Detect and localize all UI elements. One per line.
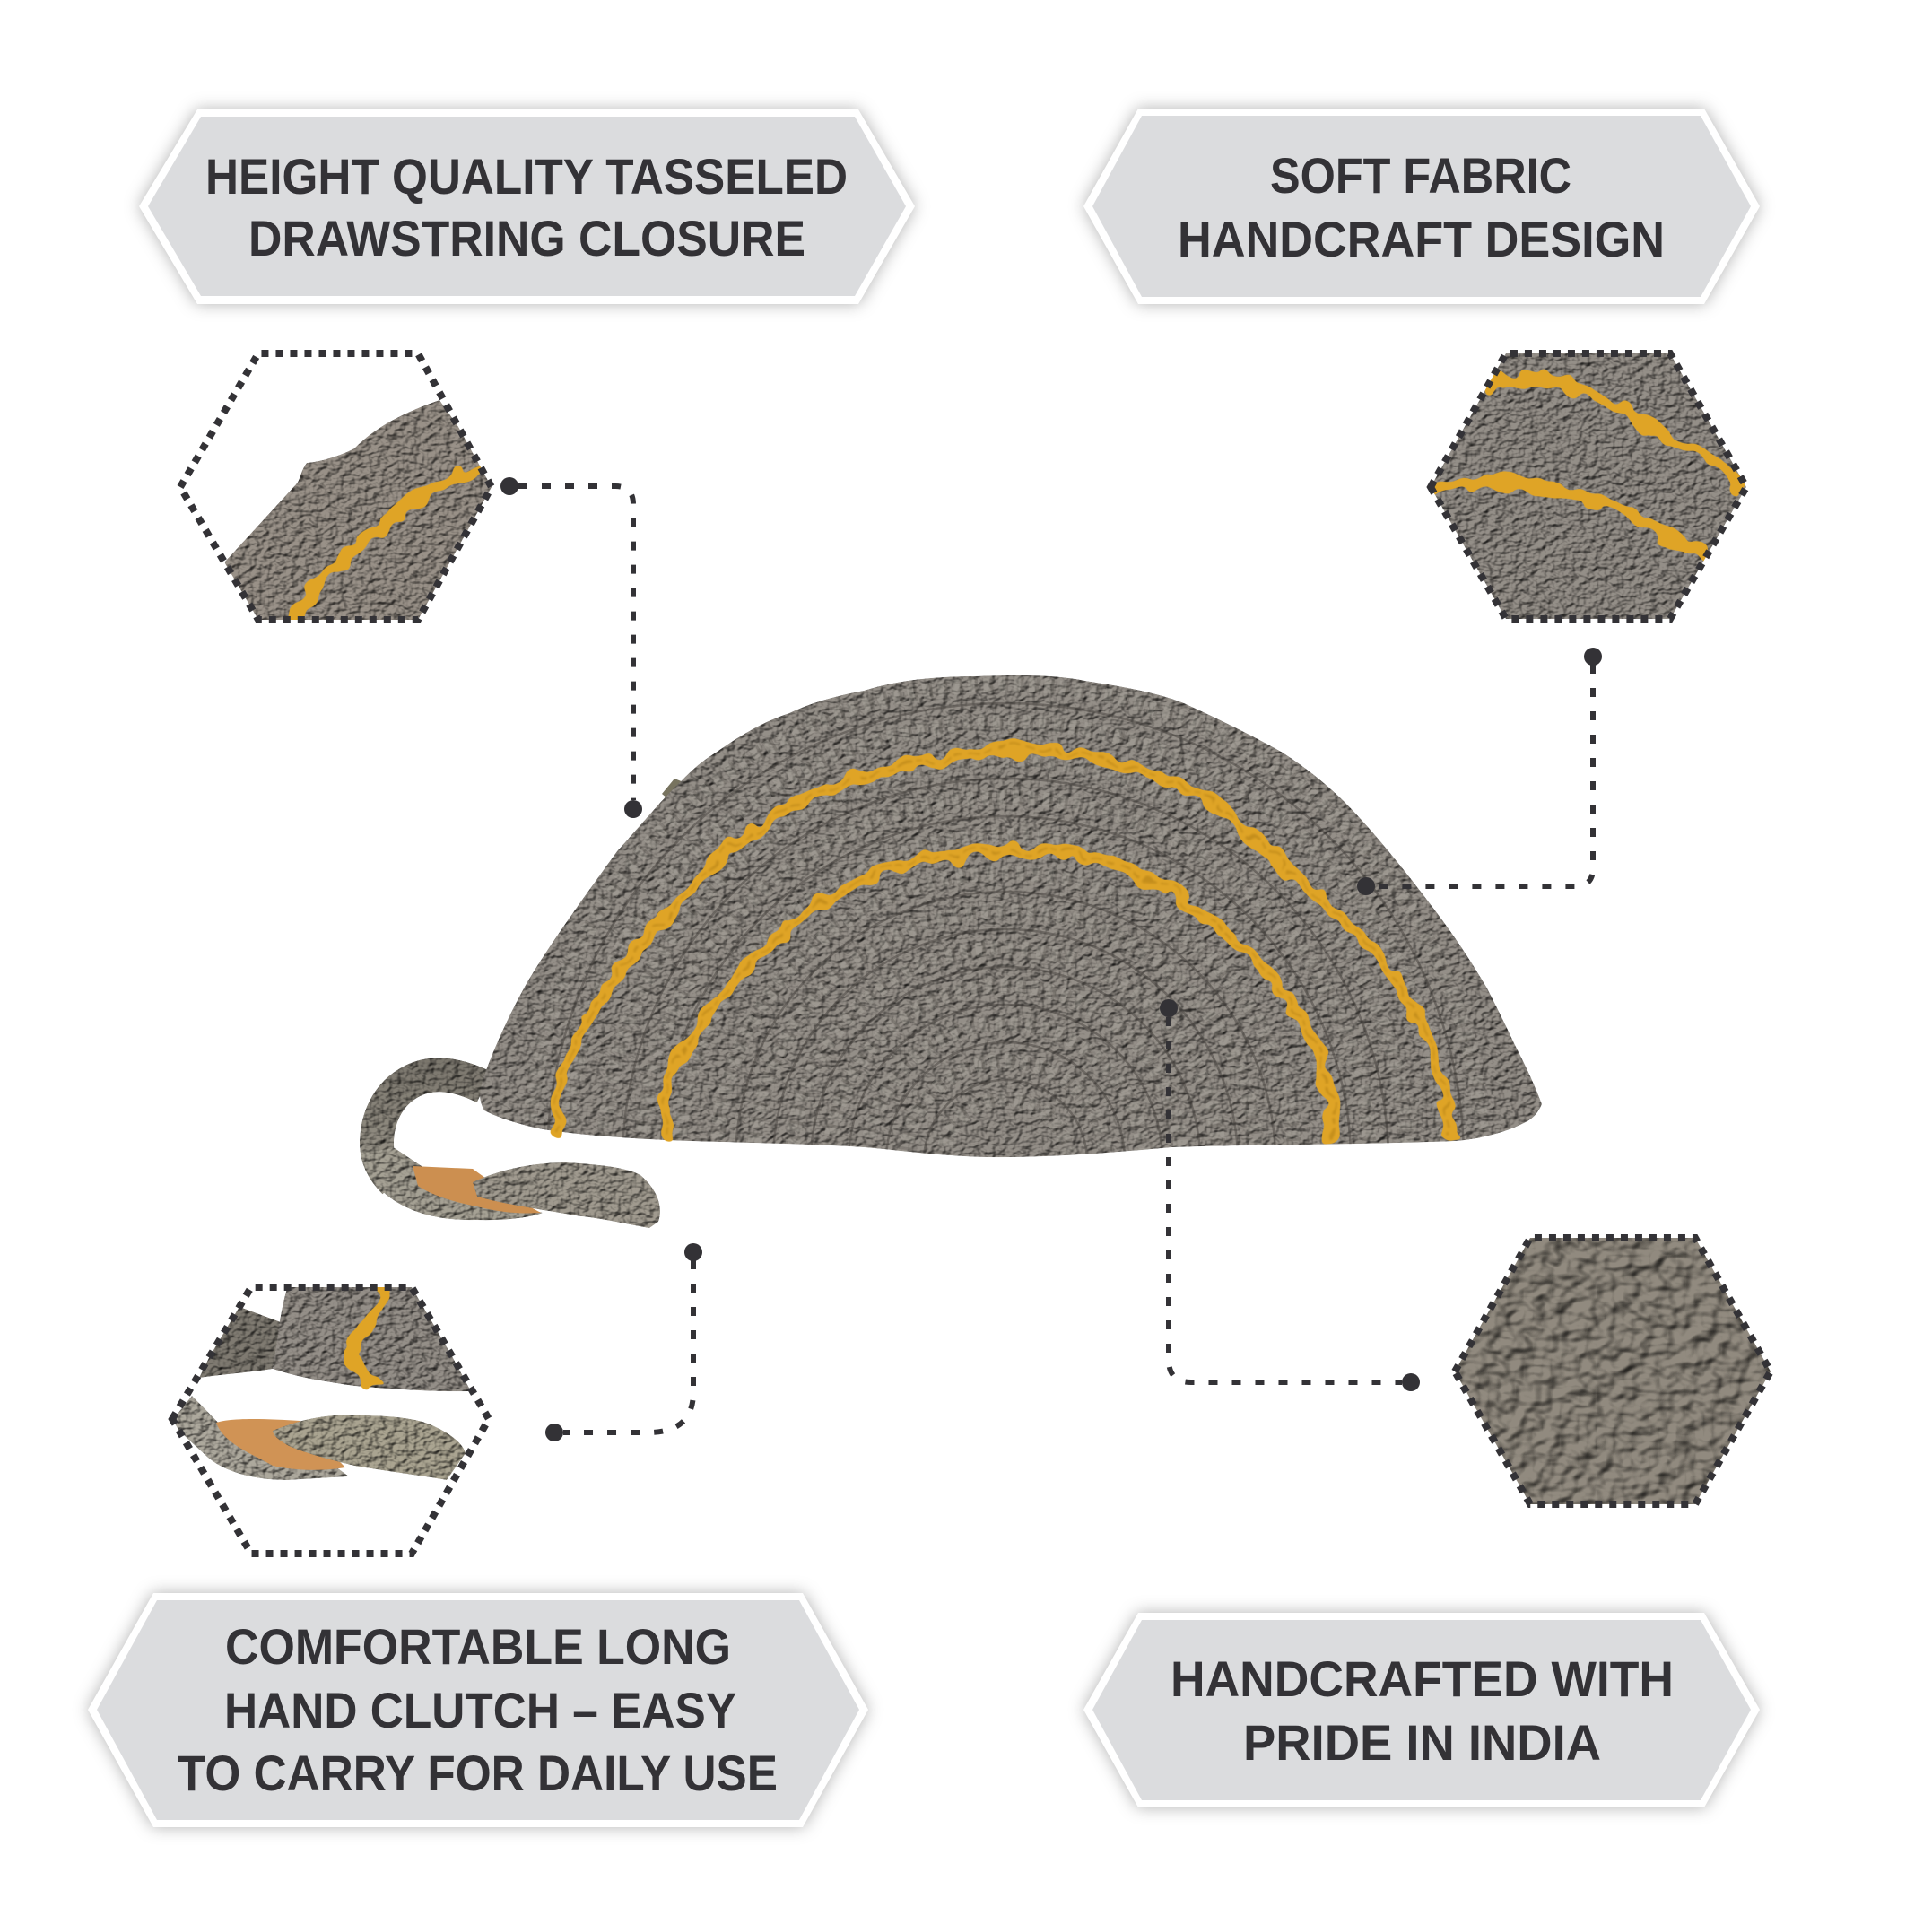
weave dotted outline (1455, 1238, 1771, 1504)
banner text: SOFT FABRIC (1270, 147, 1571, 204)
connector: fabric hexagon to bag (1357, 648, 1602, 895)
connector: strap hexagon to bag (545, 1243, 702, 1441)
clutch bag product illustration (361, 675, 1542, 1639)
tassel loop (473, 1162, 660, 1228)
closure dotted outline (180, 353, 492, 620)
banner: soft fabric handcraft design (1083, 109, 1760, 304)
strap lower section (361, 1148, 543, 1220)
strap upper section (199, 1305, 281, 1378)
banner text: PRIDE IN INDIA (1243, 1714, 1601, 1771)
bag corner (273, 1283, 471, 1391)
connector: weave hexagon to bag (1160, 999, 1420, 1391)
concentric rope rings (523, 677, 1489, 1155)
yellow trim on corner (349, 1284, 384, 1387)
banner: tasseled drawstring closure (139, 109, 915, 304)
upper yellow trim (1491, 379, 1740, 490)
closure fabric (224, 400, 492, 620)
soft fabric dotted outline (1431, 353, 1746, 619)
soft fabric texture (1426, 350, 1751, 623)
lower strap (170, 1396, 349, 1480)
hexagon detail: closure (180, 353, 502, 628)
banner text: DRAWSTRING CLOSURE (248, 210, 805, 266)
lower yellow trim (1435, 482, 1702, 553)
closure yellow trim (291, 469, 486, 623)
body (480, 675, 1542, 1157)
banner text: HAND CLUTCH – EASY (224, 1682, 736, 1738)
banner text: HANDCRAFTED WITH (1171, 1650, 1674, 1707)
hand strap dotted outline (172, 1287, 489, 1554)
connector: closure hexagon to bag (500, 477, 642, 818)
wood toggle (216, 1419, 345, 1470)
hexagon detail: soft fabric (1426, 350, 1751, 623)
weave texture (1451, 1234, 1774, 1508)
banner: comfortable long hand clutch (88, 1593, 868, 1827)
banner text: HANDCRAFT DESIGN (1178, 211, 1665, 267)
hexagon detail: hand strap (170, 1283, 489, 1554)
strap (377, 1075, 484, 1182)
banner text: COMFORTABLE LONG (225, 1618, 731, 1675)
hexagon detail: close-up weave (1451, 1234, 1774, 1508)
wooden toggle (413, 1166, 541, 1214)
closure nub (662, 779, 683, 803)
inner yellow ric-rac trim (666, 850, 1330, 1136)
banner: handcrafted with pride in India (1083, 1613, 1760, 1807)
banner text: TO CARRY FOR DAILY USE (178, 1745, 778, 1801)
outer yellow ric-rac trim (556, 750, 1450, 1136)
tassel end (273, 1415, 466, 1480)
banner text: HEIGHT QUALITY TASSELED (205, 148, 848, 205)
